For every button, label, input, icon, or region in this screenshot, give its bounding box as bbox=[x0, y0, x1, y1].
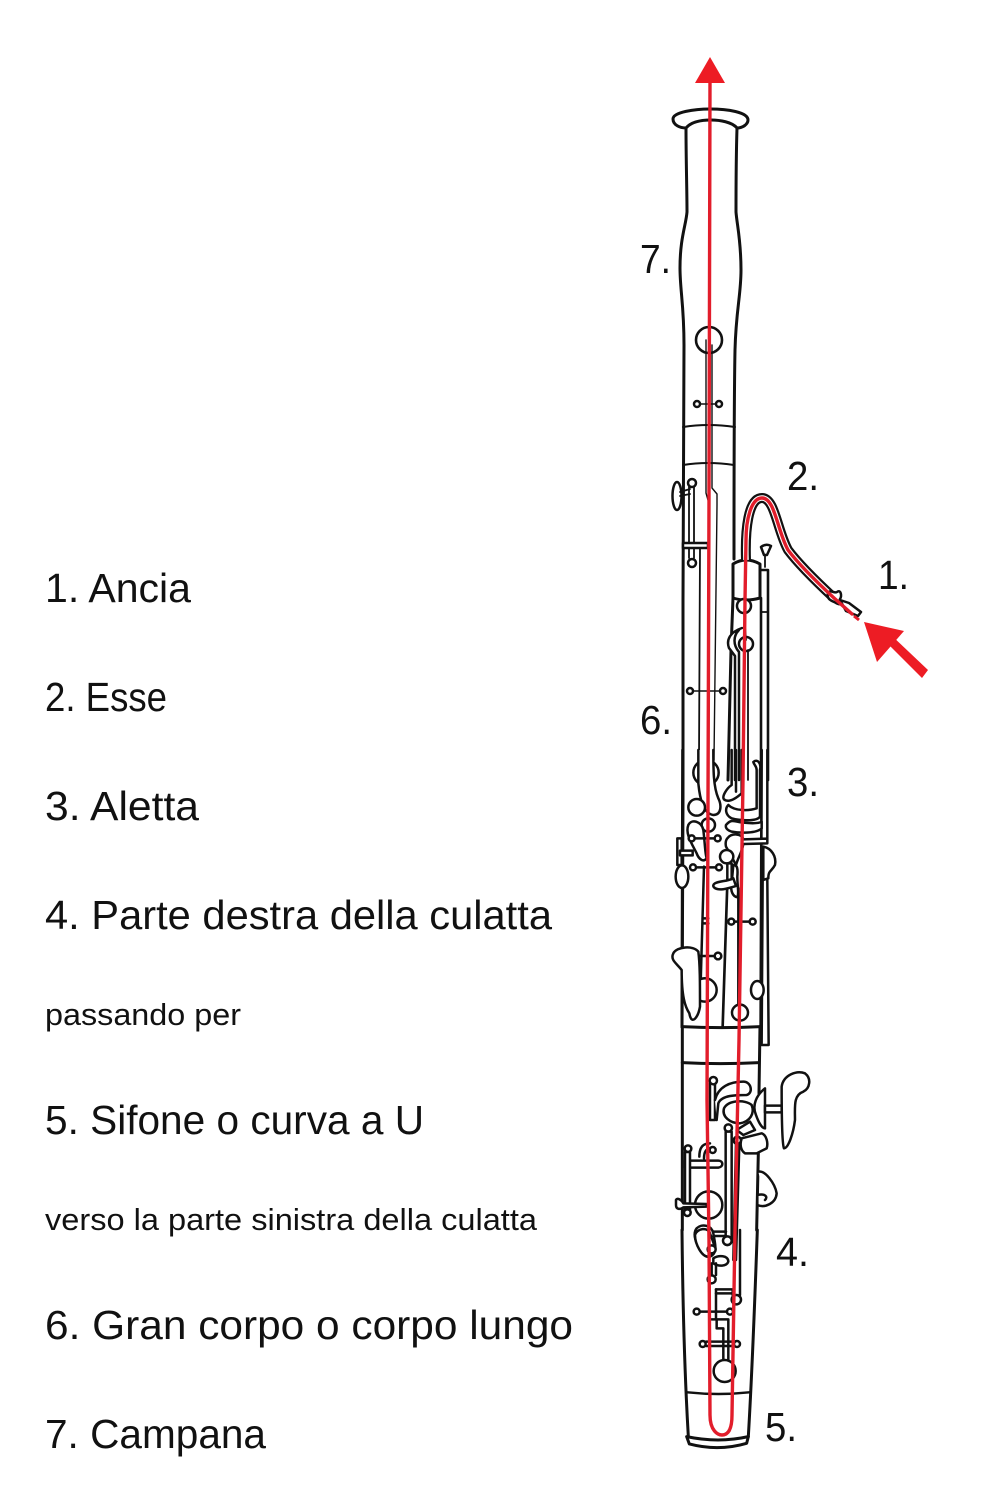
legend item 4: 4. Parte destra della culatta bbox=[45, 892, 552, 938]
lower boot joint bbox=[682, 1229, 757, 1448]
legend item 6: 6. Gran corpo o corpo lungo bbox=[45, 1302, 573, 1348]
legend item 3: 3. Aletta bbox=[45, 783, 199, 829]
label 4: 4. bbox=[776, 1229, 809, 1275]
arrow: air exits at the bell bbox=[695, 57, 725, 83]
legend item 2: 2. Esse bbox=[45, 674, 167, 720]
legend item 7: 7. Campana bbox=[45, 1411, 266, 1457]
connector text: verso la parte sinistra: verso la parte sinistra della culatta bbox=[45, 1202, 538, 1237]
red airflow line through the instrument bbox=[707, 80, 852, 1435]
wing joint upper part bbox=[728, 545, 771, 780]
label 2: 2. bbox=[787, 453, 819, 499]
label 5: 5. bbox=[765, 1404, 797, 1450]
bassoon line drawing bbox=[640, 57, 928, 1450]
red airflow dash past the reed bbox=[854, 616, 859, 620]
label 3: 3. bbox=[787, 759, 819, 805]
bell and long joint outline bbox=[673, 109, 748, 1027]
arrow: air enters at the reed bbox=[864, 622, 928, 678]
label 7: 7. bbox=[640, 236, 671, 282]
esse crook bbox=[746, 498, 834, 598]
label 6: 6. bbox=[640, 697, 672, 743]
reed bbox=[828, 591, 861, 616]
number labels on the diagram bbox=[640, 236, 909, 1450]
upper thumb keys bbox=[672, 479, 708, 567]
label 1: 1. bbox=[878, 552, 909, 598]
boot joint section with keywork bbox=[676, 1027, 809, 1260]
middle keywork section bbox=[672, 750, 775, 1045]
legend item 1: 1. Ancia bbox=[45, 565, 191, 611]
legend: list of bassoon parts bbox=[45, 565, 573, 1457]
legend item 5: 5. Sifone o curva a U bbox=[45, 1097, 424, 1143]
connector text: passando per: passando per bbox=[45, 997, 241, 1032]
